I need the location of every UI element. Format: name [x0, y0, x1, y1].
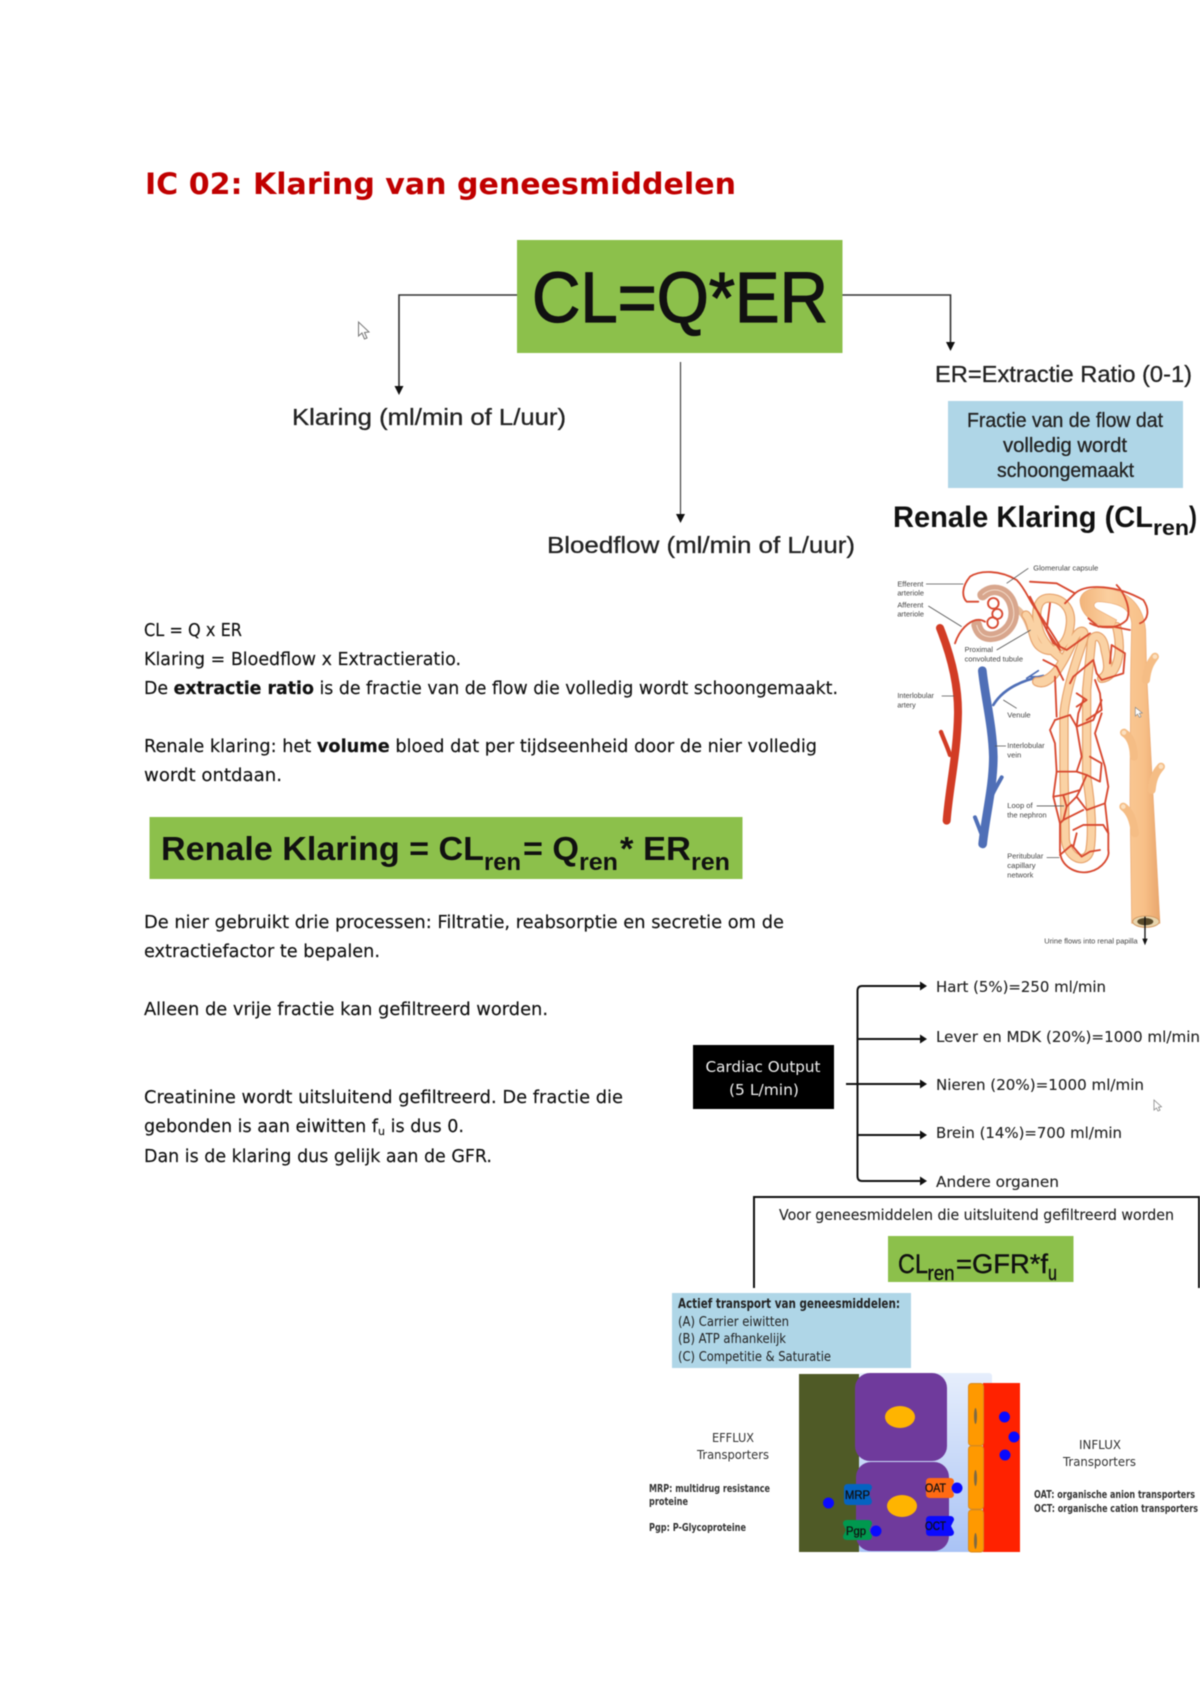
text block: creatinine	[144, 1088, 623, 1167]
drug molecules	[823, 1412, 1020, 1536]
icon: mouse cursor	[1154, 1100, 1162, 1111]
text block: creatinine: gebonden is aan eiwitten f	[144, 1117, 377, 1137]
diagram: cardiac output	[693, 978, 1200, 1191]
label: Bloedflow: Bloedflow (ml/min of L/uur)	[547, 532, 855, 558]
label: efflux legend: MRP: multidrug resistance	[649, 1483, 770, 1495]
label: Klaring: Klaring (ml/min of L/uur)	[292, 404, 566, 430]
text block: creatinine: u	[378, 1125, 385, 1138]
text block: renale klaring: wordt ontdaan.	[144, 766, 282, 786]
callout: actief transport	[672, 1293, 911, 1368]
artery	[940, 628, 958, 821]
text block: processes: De nier gebruikt drie processen: Filtratie, reabsorptie en secretie om de	[144, 913, 784, 933]
panel: GFR box	[754, 1197, 1199, 1288]
transporter: OCT: OCT	[925, 1519, 947, 1533]
title: IC 02: Klaring van geneesmiddelen	[145, 167, 736, 201]
blood vessel	[983, 1383, 1020, 1552]
formula banner: renale klaring: ren	[484, 849, 521, 876]
transporter: Pgp	[843, 1520, 872, 1540]
formula banner: renale klaring: ren	[579, 849, 618, 876]
organ labels	[936, 978, 1200, 1191]
transporter: OAT: OAT	[925, 1481, 947, 1495]
diagram: CL formula	[292, 240, 1192, 558]
formula: CLren: u	[1048, 1263, 1057, 1285]
text block: CL definition: CL = Q x ER	[144, 621, 242, 641]
transporter: MRP	[844, 1484, 872, 1505]
text block: CL definition: De extractie ratio is de fractie van de flow die volledig wordt schoongemaakt.	[144, 679, 838, 699]
text block: creatinine: is dus 0.	[385, 1117, 464, 1137]
formula: CLren: =GFR*f	[956, 1249, 1048, 1279]
transporter: Pgp: Pgp	[846, 1524, 866, 1538]
lumen	[799, 1374, 859, 1552]
text block: CL definition	[144, 621, 838, 699]
formula banner: renale klaring	[150, 817, 742, 879]
formula: CLren	[888, 1236, 1074, 1285]
organ labels: Andere organen	[936, 1173, 1059, 1191]
formula: CLren: ren	[928, 1263, 954, 1285]
formula banner: renale klaring: ren	[691, 849, 730, 876]
formula banner: renale klaring: = Q	[523, 830, 579, 867]
text block: vrije fractie: Alleen de vrije fractie kan gefiltreerd worden.	[144, 1000, 548, 1020]
nephron labels: artery	[897, 702, 916, 709]
collecting duct	[1080, 588, 1163, 927]
nephron labels: Urine flows into renal papilla	[1044, 938, 1138, 945]
nephron labels: Glomerular capsule	[1033, 566, 1098, 573]
organ labels: Nieren (20%)=1000 ml/min	[936, 1076, 1144, 1094]
box: cardiac output: Cardiac Output	[706, 1058, 820, 1076]
interstitial background	[858, 1373, 992, 1552]
callout: actief transport: Actief transport van geneesmiddelen:	[678, 1297, 900, 1312]
panel: GFR box: Voor geneesmiddelen die uitsluitend gefiltreerd worden	[779, 1206, 1174, 1224]
label: efflux legend: Pgp: P-Glycoproteine	[649, 1522, 746, 1534]
arrow: to Klaring	[394, 295, 517, 395]
nephron labels: arteriole	[897, 591, 924, 598]
transporter: MRP: MRP	[845, 1488, 870, 1502]
nephron labels	[897, 566, 1138, 945]
callout: ER definition	[948, 401, 1183, 488]
text block: processes: extractiefactor te bepalen.	[144, 942, 380, 962]
nephron labels: vein	[1007, 752, 1021, 759]
glomerular capsule	[977, 590, 1030, 637]
box: cardiac output	[693, 1045, 834, 1109]
capillaries	[955, 572, 1147, 872]
label: efflux legend	[649, 1483, 770, 1534]
formula: CLren: CL	[898, 1249, 928, 1279]
box: cardiac output: (5 L/min)	[729, 1081, 799, 1099]
label: efflux: Transporters	[696, 1448, 769, 1462]
transporter: OCT	[925, 1516, 954, 1536]
nephron labels: capillary	[1007, 863, 1036, 870]
nephron labels: Afferent	[897, 602, 923, 609]
arrow: to ER	[842, 295, 955, 351]
formula banner: renale klaring: Renale Klaring = CL	[161, 830, 484, 867]
text block: renale klaring	[144, 737, 817, 786]
label: ER: ER=Extractie Ratio (0-1)	[935, 361, 1192, 387]
diagram: nephron	[897, 566, 1163, 945]
nephron labels: Loop of	[1007, 803, 1033, 810]
nephron labels: network	[1007, 872, 1034, 879]
endothelial cells	[968, 1384, 984, 1552]
nephron labels: Interlobular	[897, 693, 935, 700]
nephron labels: Venule	[1007, 713, 1031, 720]
formula banner: renale klaring: * ER	[620, 830, 691, 867]
nephron labels: convoluted tubule	[965, 656, 1023, 663]
text block: processes	[144, 913, 784, 962]
label: influx	[1062, 1438, 1136, 1469]
text block: CL definition: Klaring = Bloedflow x Extractieratio.	[144, 650, 461, 670]
callout: ER definition: Fractie van de flow dat	[967, 409, 1163, 432]
icon: mouse cursor	[1135, 707, 1142, 717]
nephron labels: Efferent	[897, 581, 923, 588]
nephron labels: the nephron	[1007, 812, 1047, 819]
tubule cell upper	[855, 1373, 947, 1461]
formula box	[517, 240, 842, 353]
text block: creatinine: Dan is de klaring dus gelijk aan de GFR.	[144, 1147, 492, 1167]
label: efflux: EFFLUX	[712, 1431, 754, 1445]
label: efflux	[696, 1431, 769, 1462]
nephron labels: arteriole	[897, 612, 924, 619]
transporter: OAT	[925, 1478, 954, 1498]
nephron labels: Interlobular	[1007, 743, 1045, 750]
label: influx: INFLUX	[1079, 1438, 1121, 1452]
proximal and distal tubules	[1026, 598, 1119, 859]
arrow: to Bloedflow	[676, 362, 685, 523]
nephron labels: Peritubular	[1007, 854, 1044, 861]
vein	[975, 671, 1052, 844]
heading: Renale Klaring: Renale Klaring (CL	[893, 501, 1153, 534]
callout: ER definition: volledig wordt	[1003, 434, 1127, 457]
organ labels: Brein (14%)=700 ml/min	[936, 1124, 1122, 1142]
heading: Renale Klaring: )	[1189, 501, 1197, 534]
arrow: urine flow	[1142, 917, 1148, 945]
callout: actief transport: (C) Competitie & Saturatie	[678, 1350, 831, 1365]
callout: actief transport: (A) Carrier eiwitten	[678, 1315, 789, 1330]
text block: renale klaring: Renale klaring: het volume bloed dat per tijdseenheid door de nier volledig	[144, 737, 817, 757]
heading: Renale Klaring: ren	[1153, 517, 1189, 540]
text block: creatinine: Creatinine wordt uitsluitend gefiltreerd. De fractie die	[144, 1088, 623, 1108]
label: influx: Transporters	[1062, 1455, 1136, 1469]
organ labels: Lever en MDK (20%)=1000 ml/min	[936, 1028, 1200, 1046]
formula box: CL=Q*ER	[532, 259, 828, 338]
branching arrows	[846, 982, 927, 1186]
label: efflux legend: proteine	[649, 1496, 688, 1508]
diagram: transporters	[649, 1373, 1198, 1552]
tubule cell lower	[856, 1462, 949, 1551]
nephron labels: Proximal	[965, 647, 993, 654]
organ labels: Hart (5%)=250 ml/min	[936, 978, 1106, 996]
label: influx legend	[1034, 1489, 1198, 1515]
callout: actief transport: (B) ATP afhankelijk	[678, 1332, 786, 1347]
callout: ER definition: schoongemaakt	[997, 459, 1134, 482]
icon: mouse cursor	[358, 322, 369, 339]
